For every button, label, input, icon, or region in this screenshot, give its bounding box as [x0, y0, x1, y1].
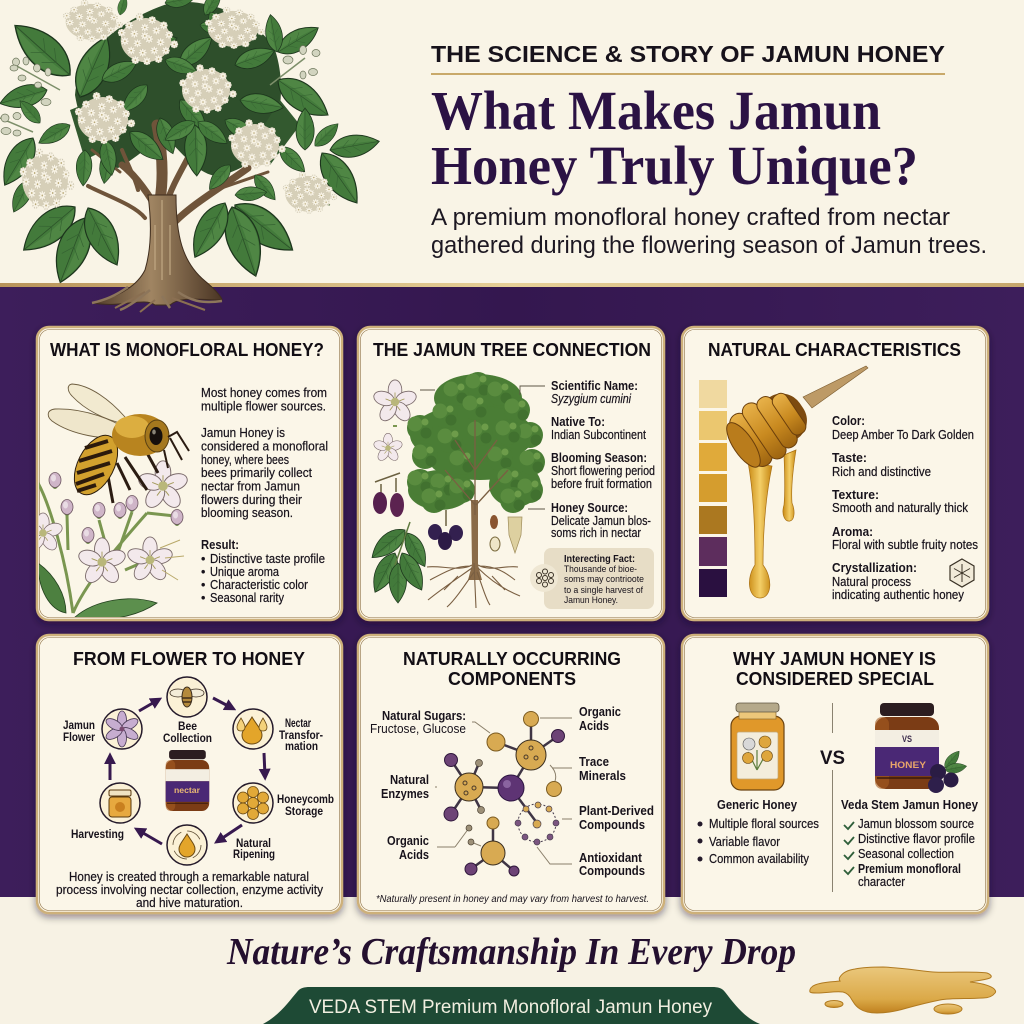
text: body copy: nectar from Jamun: [201, 480, 300, 494]
text: process description: and hive maturation.: [136, 896, 243, 910]
main title second line: Honey Truly Unique?: [431, 135, 918, 196]
header text block: [431, 41, 987, 259]
text: body copy: considered a monofloral: [201, 440, 328, 454]
process step labels: Flower: [63, 732, 95, 744]
text: honey characteristics: Rich and distinctive: [832, 465, 931, 479]
component labels: Organic: [579, 705, 621, 719]
kicker: THE SCIENCE & STORY OF JAMUN HONEY: [431, 41, 945, 67]
tagline: Nature’s Craftsmanship In Every Drop: [226, 931, 796, 973]
illustration: bee on jamun flowers: [39, 384, 190, 617]
callout: interesting fact: soms may contrioote: [564, 574, 644, 585]
text: tree facts: Delicate Jamun blos-: [551, 514, 651, 528]
process step labels: Nectar: [285, 718, 311, 730]
text: honey characteristics: Taste:: [832, 450, 867, 465]
heading: NATURALLY OCCURRING: [403, 648, 621, 669]
footnote: *Naturally present in honey and may vary from harvest to harvest.: [376, 893, 649, 905]
comparison labels and lists: character: [858, 875, 905, 889]
comparison labels and lists: Common availability: [709, 852, 810, 866]
arrows: process cycle: [110, 698, 265, 844]
text: process description: process involving nectar collection, enzyme activity: [56, 883, 324, 897]
text: process description: Honey is created through a remarkable natural: [69, 870, 309, 884]
process step labels: Ripening: [233, 849, 275, 861]
process step labels: Harvesting: [71, 829, 124, 841]
comparison labels and lists: Distinctive flavor profile: [858, 832, 975, 846]
panel: why jamun honey is special: [682, 635, 988, 913]
text: result list: •: [201, 591, 205, 605]
chart: honey colour swatches: [699, 380, 727, 597]
callout: interesting fact: Interecting Fact:: [564, 553, 635, 565]
panel: what is monofloral honey: [22, 327, 342, 620]
ribbon: brand strip: VEDA STEM Premium Monofloral Jamun Honey: [309, 997, 712, 1018]
callout: interesting fact: to a single harvest of: [564, 585, 643, 596]
process step labels: [63, 718, 334, 861]
text: body copy: blooming season.: [201, 506, 293, 520]
text: result list: Unique aroma: [210, 565, 279, 579]
illustration: honey jar centre: nectar: [174, 786, 200, 795]
comparison labels and lists: Jamun blossom source: [858, 817, 974, 831]
process step labels: Jamun: [63, 720, 95, 732]
text: honey characteristics: Crystallization:: [832, 560, 917, 575]
background: purple band: [0, 287, 1024, 897]
text: process description: [56, 870, 324, 910]
chart: molecule network: [435, 712, 572, 876]
heading: NATURAL CHARACTERISTICS: [708, 339, 961, 360]
text: result list: [201, 537, 325, 605]
panel: from flower to honey: [37, 635, 342, 913]
illustration: honey puddle: [810, 967, 996, 1014]
text: body copy: flowers during their: [201, 493, 302, 507]
text: result list: •: [201, 565, 205, 579]
heading: WHY JAMUN HONEY IS: [733, 648, 936, 669]
illustration: jamun tree with roots: [407, 372, 545, 608]
text: honey characteristics: Deep Amber To Dark Golden: [832, 428, 974, 442]
component labels: Trace: [579, 755, 609, 769]
text: body copy: Jamun Honey is: [201, 426, 285, 440]
heading: [733, 648, 936, 689]
component labels: Enzymes: [381, 787, 429, 801]
text: honey characteristics: [832, 413, 978, 602]
text: tree facts: Native To:: [551, 414, 605, 429]
process step labels: Transfor-: [279, 730, 323, 742]
component labels: Compounds: [579, 864, 645, 878]
text: result list: •: [201, 578, 205, 592]
main title: What Makes Jamun: [431, 80, 881, 141]
icon: bee collection: [167, 677, 207, 717]
text: body copy: Most honey comes from: [201, 386, 327, 400]
text: result list: Seasonal rarity: [210, 591, 285, 605]
illustration: flowering jamun tree: [0, 0, 381, 312]
process step labels: mation: [285, 741, 318, 753]
text: body copy: honey, where bees: [201, 453, 289, 467]
heading: THE JAMUN TREE CONNECTION: [373, 339, 651, 360]
text: result list: Characteristic color: [210, 578, 308, 592]
component labels: Fructose, Glucose: [370, 722, 466, 736]
text: body copy: multiple flower sources.: [201, 400, 326, 414]
text: honey characteristics: Texture:: [832, 487, 879, 502]
illustration: veda stem honey jar: VS: [902, 734, 912, 744]
text: result list: •: [201, 552, 205, 566]
background: cream header: [0, 0, 1024, 287]
heading: WHAT IS MONOFLORAL HONEY?: [50, 339, 324, 360]
component labels: Compounds: [579, 818, 645, 832]
text: tree facts: [551, 378, 655, 540]
component labels: Antioxidant: [579, 851, 643, 865]
heading: FROM FLOWER TO HONEY: [73, 648, 306, 669]
panel: naturally occurring components: [358, 635, 664, 913]
icon: crystal hexagon: [950, 559, 974, 587]
background: bottom cream band: [0, 896, 1024, 1024]
text: honey characteristics: Color:: [832, 413, 865, 428]
illustration: generic honey jar: [731, 703, 784, 790]
text: tree facts: soms rich in nectar: [551, 526, 641, 540]
text: tree facts: Syzygium cumini: [551, 392, 632, 406]
text: body copy: bees primarily collect: [201, 466, 312, 480]
component labels: Natural: [390, 773, 429, 787]
comparison labels and lists: Variable flavor: [709, 835, 780, 849]
component labels: Minerals: [579, 769, 626, 783]
process step labels: Bee: [178, 721, 197, 733]
comparison labels and lists: Multiple floral sources: [709, 817, 819, 831]
vs marker: VS: [820, 748, 845, 769]
component labels: Acids: [399, 848, 429, 862]
process step labels: Storage: [285, 806, 323, 818]
text: honey characteristics: indicating authentic honey: [832, 588, 965, 602]
icon: harvesting jar: [100, 783, 140, 823]
illustration: veda stem honey jar: HONEY: [890, 760, 926, 770]
icon: ripening drop: [167, 825, 207, 865]
subtitle second line: gathered during the flowering season of Jamun trees.: [431, 232, 987, 259]
panel: natural characteristics: [682, 327, 988, 620]
comparison labels and lists: Veda Stem Jamun Honey: [841, 798, 978, 812]
comparison labels and lists: Premium monofloral: [858, 862, 961, 876]
text: honey characteristics: Aroma:: [832, 524, 873, 539]
illustration: honey jar centre: [166, 750, 209, 811]
heading: [403, 648, 621, 689]
text: body copy: [201, 386, 328, 520]
heading: COMPONENTS: [448, 668, 576, 689]
component labels: Acids: [579, 719, 609, 733]
text: tree facts: Indian Subcontinent: [551, 428, 646, 442]
comparison labels and lists: Seasonal collection: [858, 847, 954, 861]
illustration: veda stem honey jar: [875, 703, 967, 793]
callout: interesting fact: Thousande of bioe-: [564, 564, 637, 575]
comparison labels and lists: [698, 798, 978, 889]
comparison labels and lists: Generic Honey: [717, 798, 797, 812]
component labels: Organic: [387, 834, 429, 848]
text: tree facts: Scientific Name:: [551, 378, 638, 393]
icon: nectar drops: [233, 709, 273, 749]
subtitle: A premium monofloral honey crafted from nectar: [431, 204, 950, 231]
text: honey characteristics: Natural process: [832, 575, 911, 589]
component labels: [370, 705, 654, 878]
text: honey characteristics: Smooth and naturally thick: [832, 501, 969, 515]
icon: jamun flower: [102, 709, 142, 749]
callout: interesting fact: Jamun Honey.: [564, 595, 618, 606]
text: result list: Distinctive taste profile: [210, 552, 325, 566]
text: result list: Result:: [201, 537, 239, 552]
panel: jamun tree connection: [358, 327, 664, 620]
ribbon: brand strip: [263, 987, 760, 1024]
text: tree facts: before fruit formation: [551, 477, 652, 491]
text: tree facts: Short flowering period: [551, 464, 655, 478]
component labels: Natural Sugars:: [382, 709, 466, 723]
process step labels: Natural: [236, 838, 271, 850]
process step labels: Collection: [163, 733, 212, 745]
illustration: honey dipper with drips: [717, 366, 868, 598]
process step labels: Honeycomb: [277, 794, 334, 806]
icon: honeycomb: [233, 783, 273, 823]
heading: CONSIDERED SPECIAL: [736, 668, 934, 689]
callout: interesting fact: [530, 548, 654, 609]
kicker rule: [431, 73, 945, 75]
gold divider: [0, 283, 1024, 287]
roots over purple band: [92, 287, 222, 310]
component labels: Plant-Derived: [579, 804, 654, 818]
illustration: botanical details: [366, 380, 545, 603]
text: tree facts: Blooming Season:: [551, 450, 647, 465]
text: tree facts: Honey Source:: [551, 500, 628, 515]
text: honey characteristics: Floral with subtle fruity notes: [832, 538, 978, 552]
